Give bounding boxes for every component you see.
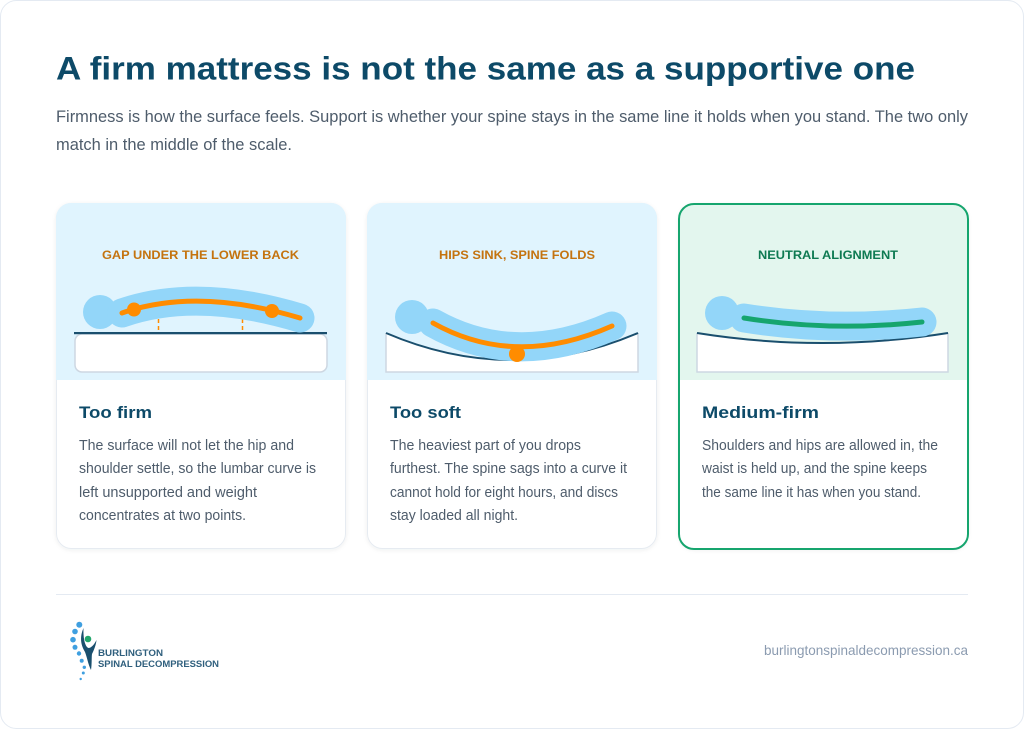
figure: sagging body xyxy=(395,300,612,362)
mattress: firm xyxy=(74,332,327,372)
body: too firm: concentrates at two points. xyxy=(79,508,246,524)
label: hips sink: HIPS SINK, SPINE FOLDS xyxy=(439,250,595,262)
gap markers xyxy=(158,319,242,332)
mattress: medium xyxy=(697,333,948,372)
intro text: Firmness is how the surface feels. Support is whether your spine stays in the same line it holds when you stand. The two only xyxy=(56,107,968,126)
label: neutral alignment: NEUTRAL ALIGNMENT xyxy=(758,250,898,262)
wordmark: BURLINGTON xyxy=(98,648,163,659)
panel: too firm xyxy=(56,203,346,548)
icon: figure xyxy=(81,628,96,670)
body: too soft: cannot hold for eight hours, and discs xyxy=(390,485,618,501)
figure: neutral body xyxy=(705,296,922,330)
body: too firm: left unsupported and weight xyxy=(79,485,257,501)
body: medium-firm xyxy=(701,438,938,501)
body: too soft: furthest. The spine sags into a curve it xyxy=(390,461,627,477)
intro text: match in the middle of the scale. xyxy=(56,135,292,154)
heading: medium-firm: Medium-firm xyxy=(702,403,819,422)
body: too firm: The surface will not let the hip and xyxy=(79,438,294,454)
body: too soft: stay loaded all night. xyxy=(390,508,518,524)
body: too firm xyxy=(79,438,316,524)
logo xyxy=(70,622,219,680)
mattress: soft xyxy=(386,333,638,372)
body: too firm: shoulder settle, so the lumbar curve is xyxy=(79,461,316,477)
heading: too firm: Too firm xyxy=(79,403,152,422)
body: medium-firm: Shoulders and hips are allowed in, the xyxy=(702,438,938,454)
wordmark: SPINAL DECOMPRESSION xyxy=(98,659,219,670)
body: medium-firm: waist is held up, and the spine keeps xyxy=(701,461,927,477)
body: too soft: The heaviest part of you drops xyxy=(390,438,581,454)
body: too soft xyxy=(390,438,627,524)
body: medium-firm: the same line it has when you stand. xyxy=(702,485,921,501)
wordmark xyxy=(98,648,219,670)
intro text xyxy=(56,107,968,154)
icon: spine dots xyxy=(70,622,86,680)
panel: too soft xyxy=(367,203,657,548)
website url: burlingtonspinaldecompression.ca xyxy=(764,642,968,658)
title: A firm mattress is not the same as a supportive one xyxy=(56,50,915,86)
panel: medium-firm xyxy=(679,204,968,549)
figure: arched body xyxy=(83,295,300,329)
label: gap under the lower back: GAP UNDER THE LOWER BACK xyxy=(102,250,300,262)
heading: too soft: Too soft xyxy=(390,403,461,422)
